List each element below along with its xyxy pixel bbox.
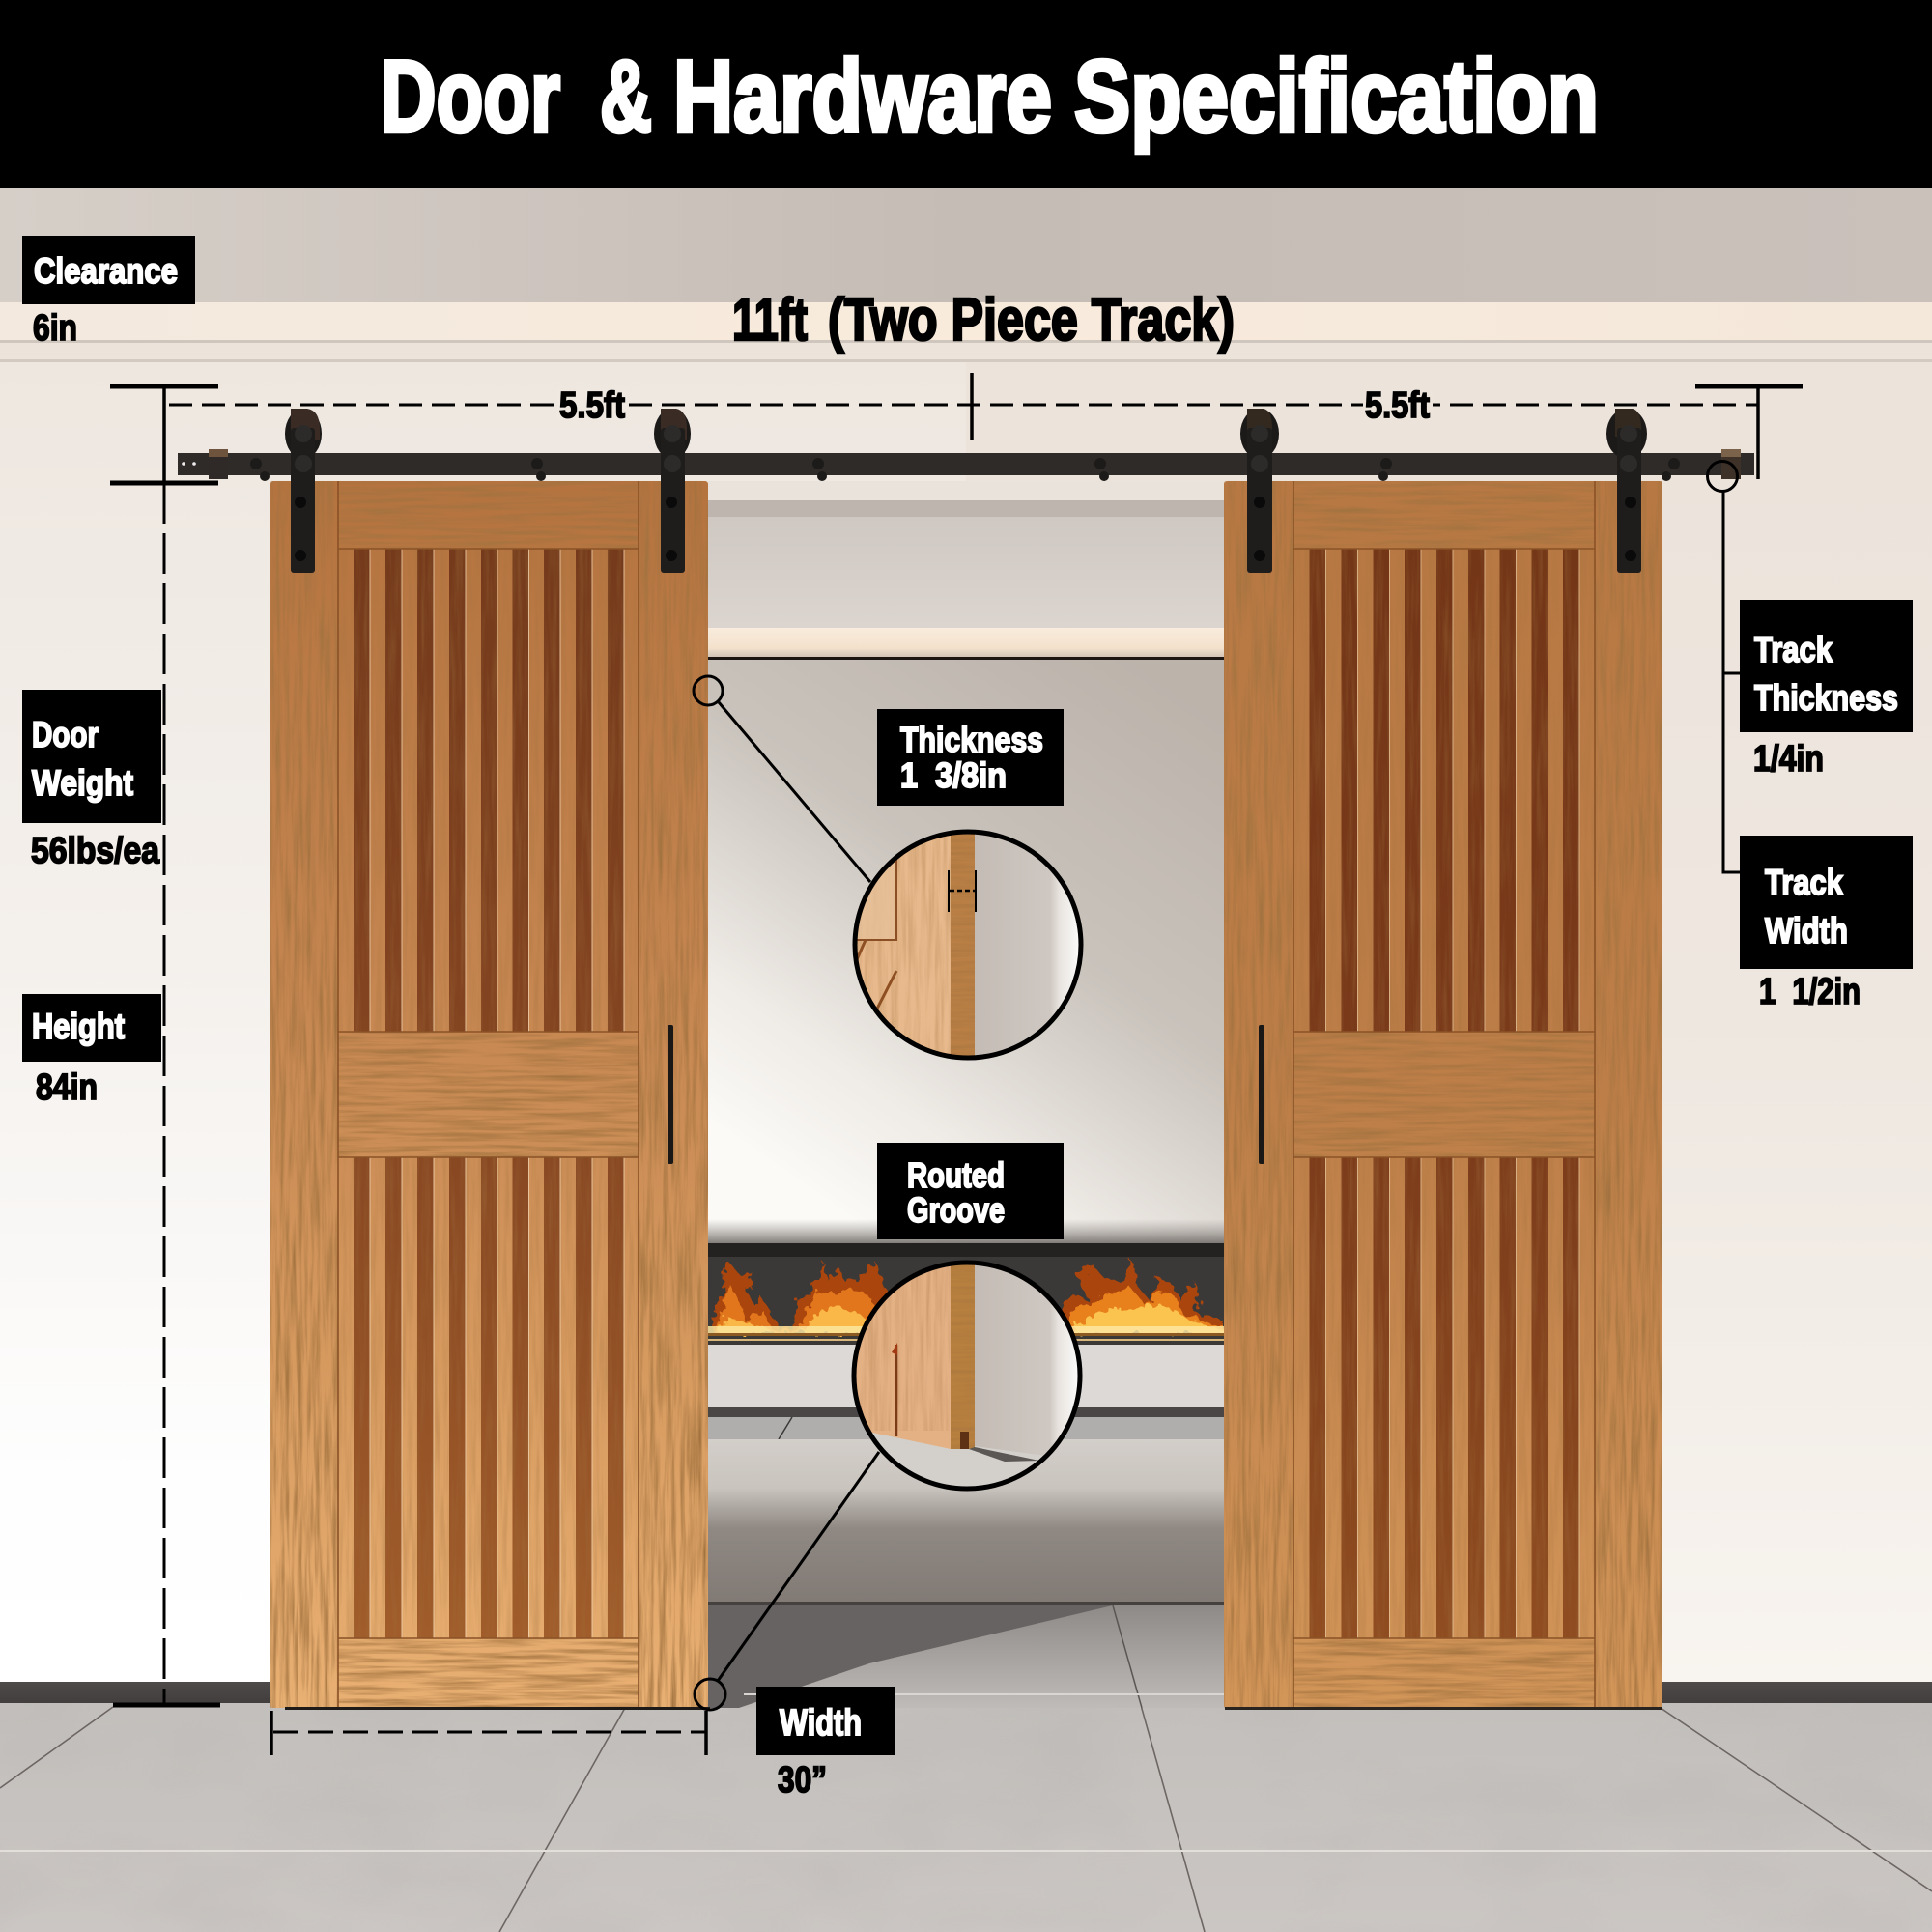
title: Door bbox=[381, 40, 560, 154]
leader line: thickness callout bbox=[694, 676, 870, 882]
callout: clearance: 6in bbox=[33, 308, 77, 349]
leader line: track callouts bbox=[1708, 462, 1740, 872]
callout: routed groove: Routed bbox=[907, 1155, 1005, 1195]
magnifier: routed groove detail bbox=[852, 1262, 1082, 1492]
icon: hanger 4 bbox=[1606, 409, 1647, 573]
callout: thickness bbox=[877, 709, 1064, 806]
callout: thickness: Thickness bbox=[900, 720, 1043, 759]
callout: track thickness bbox=[1740, 600, 1913, 780]
callout: door weight: Weight bbox=[32, 763, 133, 803]
callout: thickness: 1 3/8in bbox=[900, 755, 1007, 795]
callout: clearance bbox=[22, 236, 195, 349]
callout: track thickness: Thickness bbox=[1754, 678, 1898, 718]
callout: width: Width bbox=[780, 1703, 862, 1744]
title bbox=[381, 40, 1599, 154]
icon: right door handle bbox=[1259, 1025, 1264, 1164]
dimension: clearance and height at left bbox=[110, 386, 220, 1705]
magnifier: door thickness detail bbox=[853, 830, 1083, 1061]
callout: door weight bbox=[22, 690, 161, 871]
floor in opening bbox=[708, 1605, 1224, 1708]
label: left track section: 5.5ft bbox=[559, 385, 625, 426]
title: Hardware bbox=[673, 40, 1052, 154]
callout: clearance: Clearance bbox=[34, 251, 178, 291]
callout: track width bbox=[1740, 836, 1913, 1012]
label: track total length bbox=[732, 287, 1235, 354]
callout: routed groove: Groove bbox=[907, 1190, 1005, 1230]
callout: door weight: 56lbs/ea bbox=[31, 831, 160, 871]
callout: track width: 1 1/2in bbox=[1759, 972, 1861, 1012]
callout: height: Height bbox=[32, 1007, 125, 1046]
header bar bbox=[0, 0, 1932, 188]
flames bbox=[711, 1260, 1223, 1334]
sliding track bbox=[178, 449, 1754, 481]
callout: track thickness: Track bbox=[1754, 630, 1833, 669]
callout: height: 84in bbox=[36, 1067, 98, 1108]
callout: track width: Width bbox=[1765, 911, 1848, 951]
label: track total length: 11ft bbox=[732, 287, 808, 354]
rug bbox=[708, 1439, 1224, 1602]
dimension: track length bbox=[169, 373, 1803, 479]
panel: right door bbox=[1224, 481, 1662, 1710]
icon: hanger 1 bbox=[285, 409, 322, 573]
icon: hanger 3 bbox=[1240, 409, 1279, 573]
concrete hearth bbox=[708, 1345, 1224, 1407]
icon: hanger 2 bbox=[654, 409, 691, 573]
dimension: door width bbox=[271, 1711, 706, 1755]
callout: track thickness: 1/4in bbox=[1753, 739, 1824, 780]
callout: door weight: Door bbox=[32, 715, 99, 754]
callout: width: 30” bbox=[778, 1760, 827, 1801]
leader line: routed groove callout bbox=[695, 1452, 879, 1710]
title: Specification bbox=[1074, 40, 1599, 154]
callout: routed groove bbox=[877, 1143, 1064, 1239]
callout: width bbox=[756, 1687, 895, 1801]
center opening scene with fireplace bbox=[708, 481, 1224, 1708]
title: & bbox=[600, 40, 652, 154]
label: track total length: (Two Piece Track) bbox=[828, 287, 1235, 354]
callout: height bbox=[22, 994, 161, 1108]
panel: left door bbox=[270, 481, 710, 1710]
icon: left door handle bbox=[668, 1025, 673, 1164]
callout: track width: Track bbox=[1765, 863, 1843, 902]
label: right track section: 5.5ft bbox=[1365, 385, 1430, 426]
fireplace dark band bbox=[708, 1243, 1224, 1345]
